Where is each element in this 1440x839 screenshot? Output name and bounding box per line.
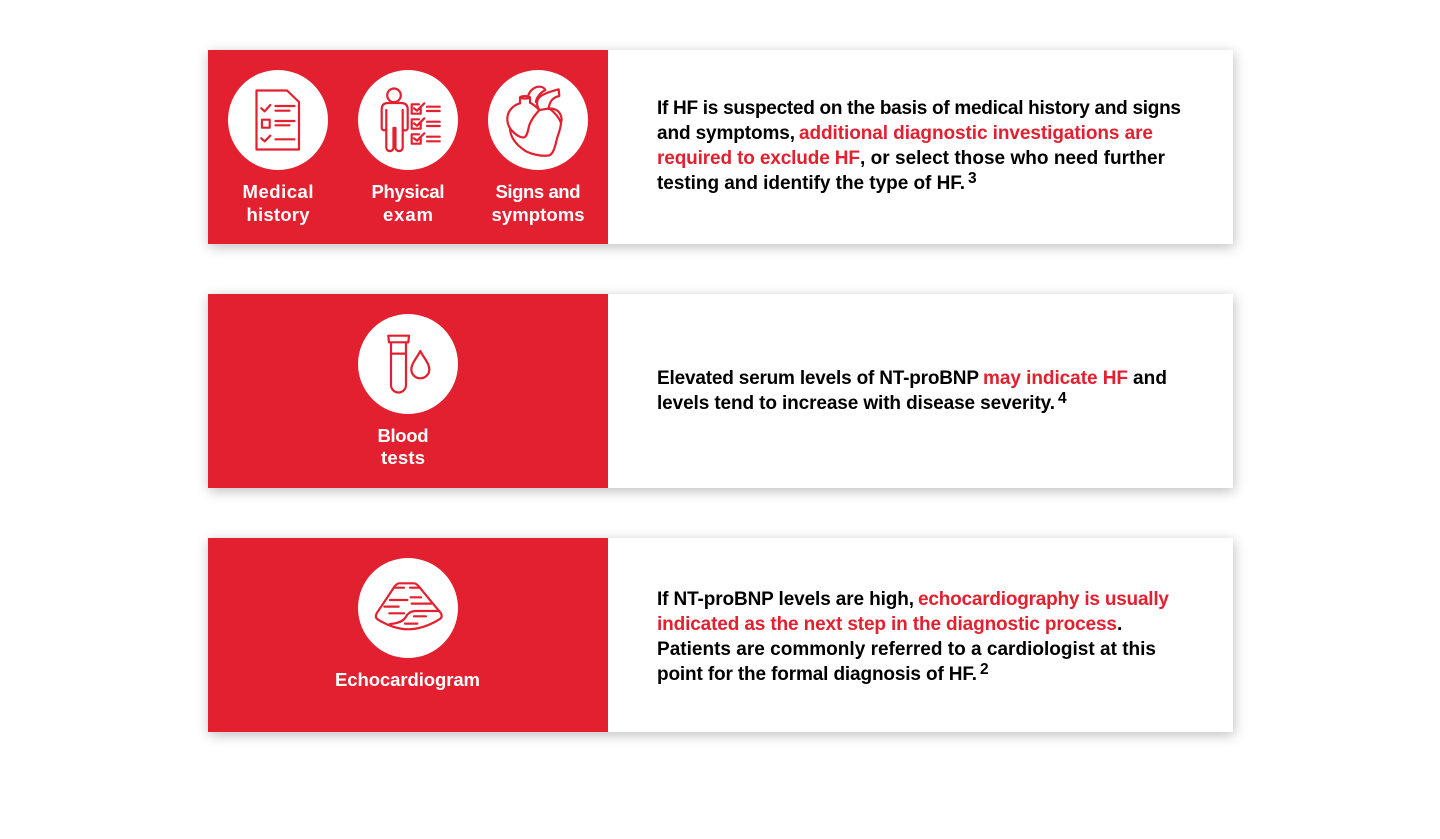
text block: clinical assessment: , or select those who need further [860,148,1166,169]
label: medical history: Medical [242,181,314,202]
text block: echocardiogram: 2 [980,661,989,678]
panel: echocardiogram [208,538,608,732]
text block: clinical assessment [657,98,1181,194]
label: blood tests [378,425,428,468]
label: medical history: history [246,204,310,225]
icon: test tube and blood drop [358,314,458,414]
text block: echocardiogram: indicated as the next step in the diagnostic process [657,614,1117,635]
label: blood tests: Blood [378,425,428,446]
panel: card 1 background [208,50,1233,244]
icon: physical exam person with checklist [358,70,458,170]
text block: echocardiogram: echocardiography is usually [918,589,1169,610]
text block: clinical assessment: and symptoms, [657,123,795,144]
text block: clinical assessment: testing and identify the type of HF. [657,173,965,194]
text block: echocardiogram: If NT-proBNP levels are high, [657,589,914,610]
label: echocardiogram: Echocardiogram [335,669,480,690]
red panel: echocardiogram [208,538,608,732]
text block: blood tests [657,368,1167,414]
label: signs and symptoms: Signs and [496,181,580,202]
label: medical history [242,181,314,225]
text block: blood tests: and [1133,368,1167,389]
icon: anatomical heart [488,70,588,170]
panel: clinical assessment [208,50,608,244]
label: physical exam: Physical [372,181,444,202]
red panel: clinical assessment [208,50,608,244]
panel: blood tests [208,294,608,488]
label: blood tests: tests [381,447,425,468]
label: physical exam: exam [383,204,433,225]
panel: card 2 background [208,294,1233,488]
text block: blood tests: 4 [1058,390,1067,407]
text block: clinical assessment: required to exclude HF [657,148,860,169]
text block: echocardiogram [657,589,1169,685]
panel: card 3 background [208,538,1233,732]
label: physical exam [372,181,444,225]
icon: echocardiogram scan [358,558,458,658]
icon: medical history checklist [228,70,328,170]
red panel: blood tests [208,294,608,488]
text block: blood tests: Elevated serum levels of NT-proBNP [657,368,979,389]
text block: clinical assessment: 3 [968,170,977,187]
label: signs and symptoms: symptoms [492,204,584,225]
text block: echocardiogram: Patients are commonly referred to a cardiologist at this [657,639,1156,660]
text block: blood tests: levels tend to increase with disease severity. [657,393,1055,414]
label: signs and symptoms [492,181,584,225]
text block: clinical assessment: If HF is suspected on the basis of medical history and signs [657,98,1181,119]
text block: echocardiogram: point for the formal diagnosis of HF. [657,664,977,685]
text block: blood tests: may indicate HF [983,368,1128,389]
text block: echocardiogram: . [1117,614,1122,635]
text block: clinical assessment: additional diagnostic investigations are [799,123,1153,144]
